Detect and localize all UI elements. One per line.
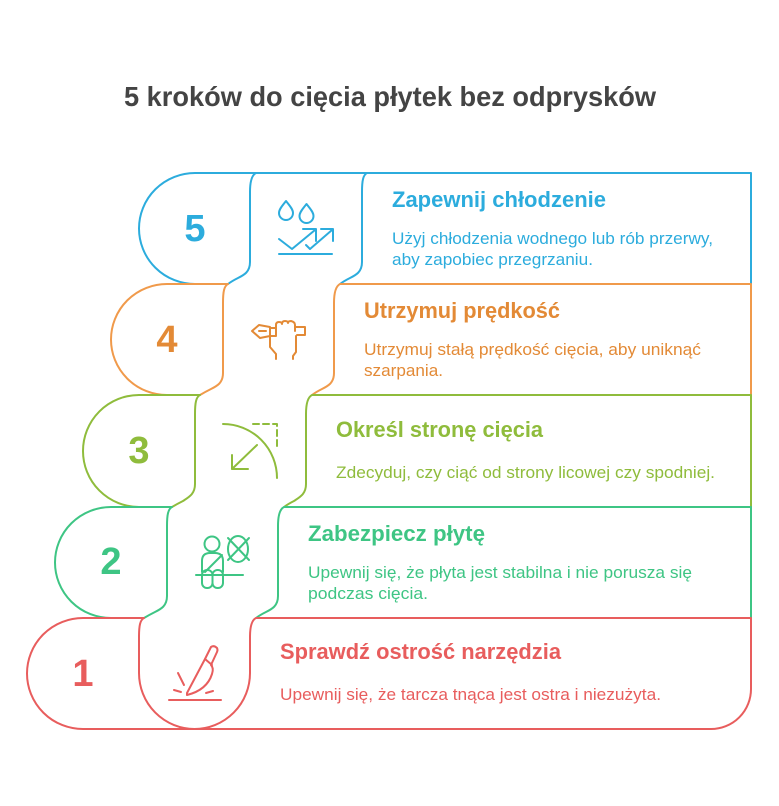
step 1: sprawdź ostrość narzędzia [27,618,751,729]
icon: hand gripping a tool [252,321,305,359]
step 5 heading: Zapewnij chłodzenie [392,187,606,212]
step 2: zabezpiecz płytę [55,507,751,618]
step 5 description: aby zapobiec przegrzaniu. [392,251,593,269]
step 4 number: 4 [156,319,178,361]
step 3 heading: Określ stronę cięcia [336,417,543,442]
icon: knife cutting a surface [169,646,221,700]
step 5: zapewnij chłodzenie [139,173,751,284]
step 2 heading: Zabezpiecz płytę [308,521,485,546]
step 5 description: Użyj chłodzenia wodnego lub rób przerwy, [392,230,713,248]
step 4 description: Utrzymuj stałą prędkość cięcia, aby uniknąć [364,341,701,359]
icon: water drops and arrows [279,201,333,254]
step 5 outline [139,173,751,284]
step 2 outline [55,507,751,618]
step 3 outline [83,395,751,507]
step 2 number: 2 [100,541,122,583]
step 4: utrzymuj prędkość [111,284,751,395]
icon: cut side arc and arrow [223,424,277,478]
step 2 description: podczas cięcia. [308,585,428,603]
step 1 description: Upewnij się, że tarcza tnąca jest ostra i niezużyta. [280,686,661,704]
step 1 outline [27,618,751,729]
step 2 description: Upewnij się, że płyta jest stabilna i nie porusza się [308,564,692,582]
title: 5 kroków do cięcia płytek bez odprysków [124,81,656,112]
step 3: określ stronę cięcia [83,395,751,507]
step 4 description: szarpania. [364,362,443,380]
icon: secured seated figure and crossed circle [196,536,249,588]
step 4 heading: Utrzymuj prędkość [364,298,560,323]
step 4 outline [111,284,751,395]
step 5 number: 5 [184,208,206,250]
step 3 description: Zdecyduj, czy ciąć od strony licowej czy spodniej. [336,464,715,482]
step 3 number: 3 [128,430,150,472]
step 1 heading: Sprawdź ostrość narzędzia [280,639,561,664]
step 1 number: 1 [72,653,94,695]
